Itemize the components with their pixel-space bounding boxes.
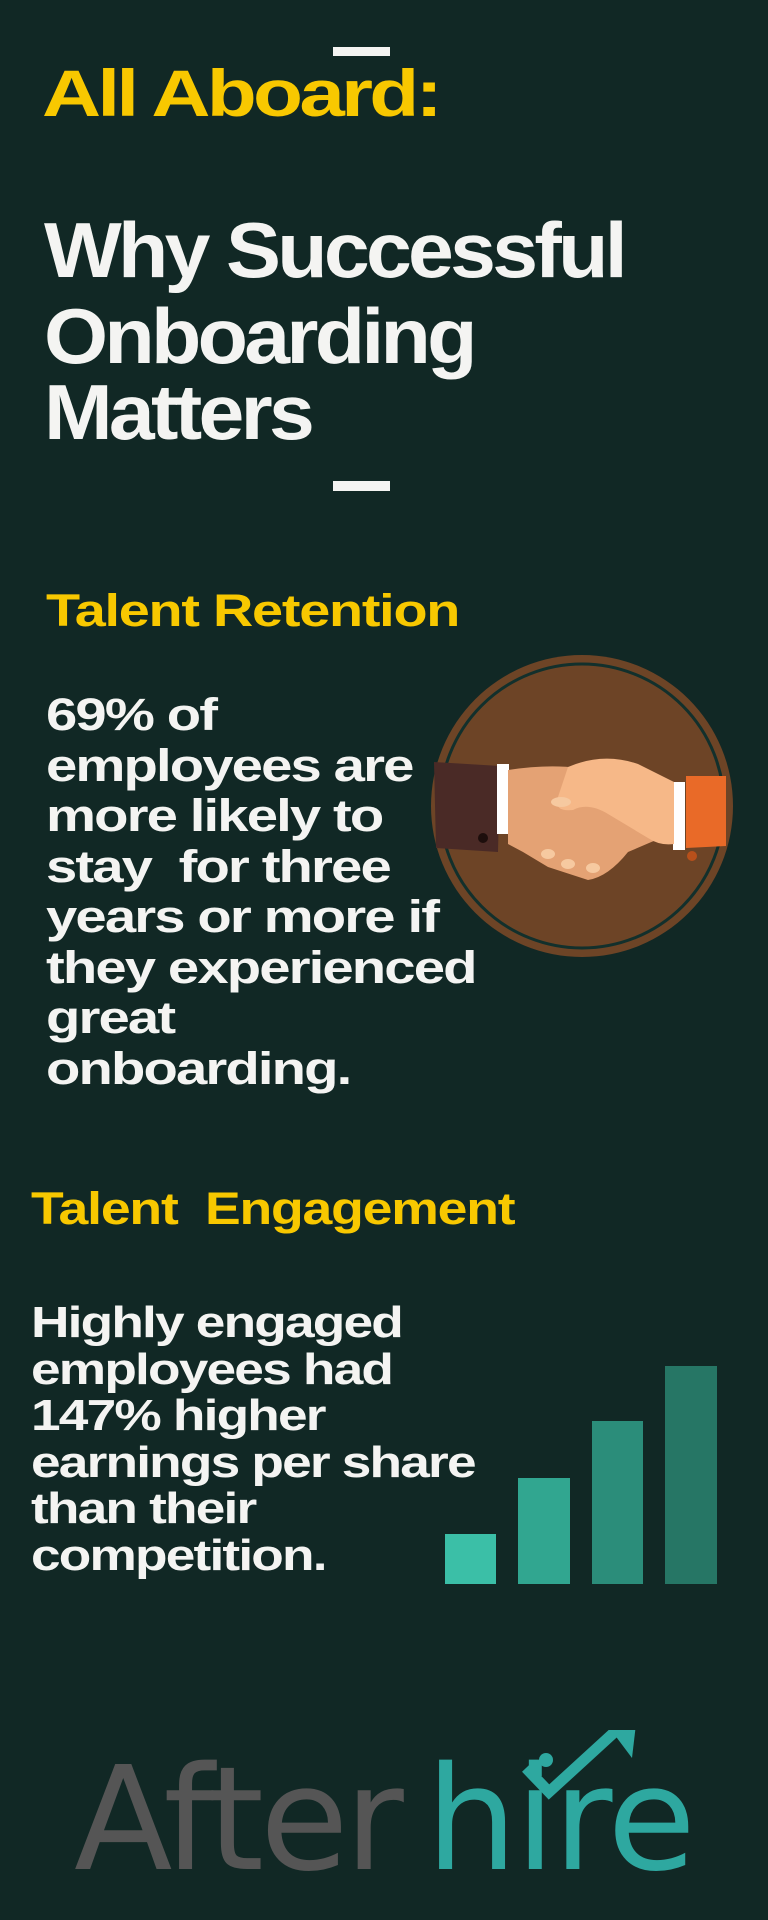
- text block: retention stat: [46, 689, 476, 1094]
- heading: Talent Retention: Talent Retention: [46, 585, 459, 636]
- text block: retention stat: onboarding.: [46, 1042, 350, 1094]
- title: main heading: Why Successful: [44, 206, 624, 294]
- icon: handshake circle: [431, 655, 733, 957]
- logo: AfterHire: hire: [426, 1735, 694, 1903]
- text block: retention stat: they experienced: [46, 942, 476, 992]
- decorative bar top: [333, 47, 390, 56]
- title: main heading: [44, 206, 624, 456]
- chart: rising bars: [445, 1366, 717, 1584]
- text block: engagement stat: earnings per share: [31, 1438, 475, 1486]
- text block: engagement stat: competition.: [31, 1530, 326, 1580]
- text block: engagement stat: Highly engaged: [31, 1298, 402, 1347]
- text block: retention stat: years or more if: [46, 891, 438, 942]
- logo: AfterHire: [74, 1730, 694, 1903]
- logo: AfterHire: After: [74, 1735, 400, 1903]
- text block: retention stat: more likely to: [46, 790, 382, 841]
- text block: retention stat: 69% of: [46, 689, 216, 740]
- heading: Talent Engagement: Talent Engagement: [31, 1183, 514, 1234]
- title: main heading: Onboarding: [44, 292, 474, 380]
- text block: engagement stat: employees had: [31, 1344, 392, 1394]
- text block: retention stat: stay for three: [46, 840, 390, 892]
- text block: retention stat: great: [46, 992, 174, 1043]
- text block: engagement stat: [31, 1298, 475, 1580]
- decorative bar bottom: [333, 481, 390, 491]
- text block: engagement stat: than their: [31, 1484, 255, 1533]
- text block: engagement stat: 147% higher: [31, 1391, 325, 1440]
- title: main heading: Matters: [44, 368, 311, 456]
- icon: check arrow: [522, 1730, 636, 1800]
- text block: retention stat: employees are: [46, 740, 413, 790]
- title: All Aboard: All Aboard:: [42, 56, 439, 130]
